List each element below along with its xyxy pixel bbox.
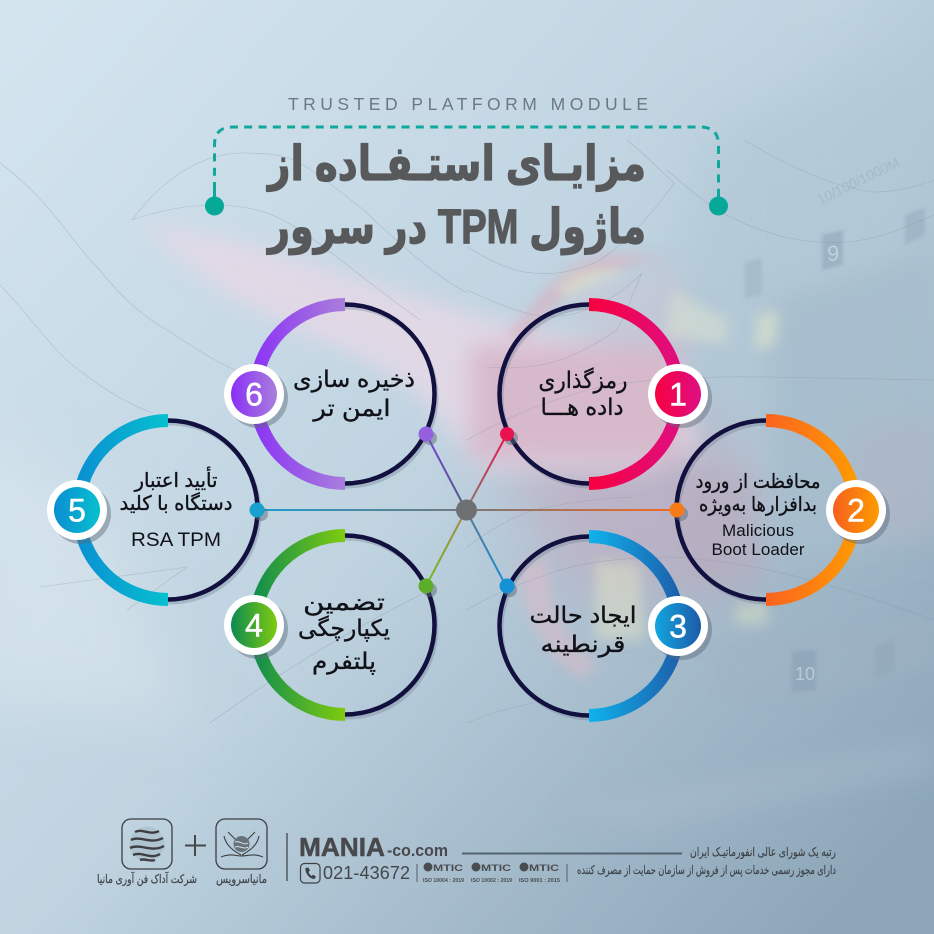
step 2: protection from malicious boot loader: بدافزارها به‌ویژه: [699, 494, 817, 516]
step 4: platform integrity: 4: [245, 608, 263, 644]
step 2: protection from malicious boot loader: [670, 420, 890, 602]
step 6: safer storage: ایمن تر: [312, 395, 390, 422]
footer divider: [286, 833, 288, 881]
footer: MANIA-co.com brand: MANIA: [299, 832, 385, 862]
step 5: device attestation with RSA TPM key: تأیید اعتبار: [134, 466, 218, 492]
certificate ISO 10004: [423, 862, 464, 884]
certificate ISO 9001: ISO 9001 : 2015: [519, 878, 560, 884]
certificate ISO 9001: MTIC: [529, 863, 560, 873]
central hub: [456, 500, 477, 520]
certificate ISO 10004: MTIC: [433, 863, 464, 873]
footer: credentials text: رتبه یک شورای عالی انفورماتیـک ایران: [690, 845, 836, 860]
step 4: platform integrity: [224, 536, 437, 718]
connector spokes: [257, 434, 677, 586]
step 2: protection from malicious boot loader: Boot Loader: [712, 540, 805, 559]
background: blurred server photo: 10: [795, 664, 815, 684]
icon: phone: [300, 864, 320, 883]
step 5: device attestation with RSA TPM key: [47, 420, 268, 602]
step 4: platform integrity: یکپارچگی: [298, 615, 390, 642]
certificate ISO 10002: [471, 862, 512, 884]
footer: credentials text: [577, 845, 836, 878]
step 1: data encryption: داده هـــا: [540, 394, 624, 420]
certificate ISO 10004: ISO 10004 : 2019: [423, 878, 464, 884]
step 5: device attestation with RSA TPM key: RSA TPM: [131, 530, 221, 551]
background: blurred server photo: 9: [827, 241, 839, 266]
footer: ISO certifications: [417, 862, 567, 884]
icon: Mania Service logo: [216, 819, 267, 869]
footer: rank line: [462, 852, 682, 854]
step 5: device attestation with RSA TPM key: 5: [68, 492, 86, 528]
icon: Adak company logo: [122, 819, 172, 869]
title frame: dashed bracket with dots: [205, 127, 728, 216]
step 2: protection from malicious boot loader: Malicious: [722, 521, 794, 540]
decorative contour lines: [0, 140, 934, 723]
title: مزایـای استـفـاده از: [266, 138, 646, 192]
step 1: data encryption: رمزگذاری: [538, 367, 628, 394]
footer: company logos: [97, 819, 267, 887]
step 2: protection from malicious boot loader: 2: [847, 492, 865, 528]
step 3: quarantine mode: ایجاد حالت: [530, 602, 636, 628]
background: blurred server photo: 10/100/1000M: [814, 154, 902, 208]
certificate ISO 9001: [519, 862, 560, 884]
step 3: quarantine mode: [500, 536, 712, 718]
step 4: platform integrity: پلتفرم: [312, 648, 376, 675]
step 1: data encryption: [500, 304, 712, 486]
step 6: safer storage: 6: [245, 376, 263, 412]
footer: MANIA-co.com brand: -co.com: [387, 841, 448, 860]
certificate ISO 10002: ISO 10002 : 2019: [471, 878, 512, 884]
logo captions: شرکت آداک فن آوری مانیا: [97, 871, 197, 887]
step 6: safer storage: ذخیره سازی: [293, 366, 415, 393]
title: ماژول TPM در سرور: [266, 201, 646, 255]
plus sign: [185, 835, 206, 856]
step 3: quarantine mode: قرنطینه: [540, 631, 626, 658]
step 3: quarantine mode: 3: [669, 608, 687, 644]
step 4: platform integrity: تضمین: [303, 589, 385, 616]
step 6: safer storage: [224, 304, 437, 486]
subtitle: TRUSTED PLATFORM MODULE: TRUSTED PLATFORM MODULE: [288, 94, 648, 114]
step 1: data encryption: 1: [669, 376, 687, 412]
title: [266, 138, 646, 255]
step 5: device attestation with RSA TPM key: دستگاه با کلید: [120, 492, 232, 515]
certificate ISO 10002: MTIC: [481, 863, 512, 873]
footer: phone: 021-43672: [323, 863, 410, 883]
step 2: protection from malicious boot loader: محافظت از ورود: [696, 471, 820, 493]
footer: MANIA-co.com brand: [299, 832, 448, 862]
footer: company logos: مانیاسرویس: [216, 872, 267, 887]
